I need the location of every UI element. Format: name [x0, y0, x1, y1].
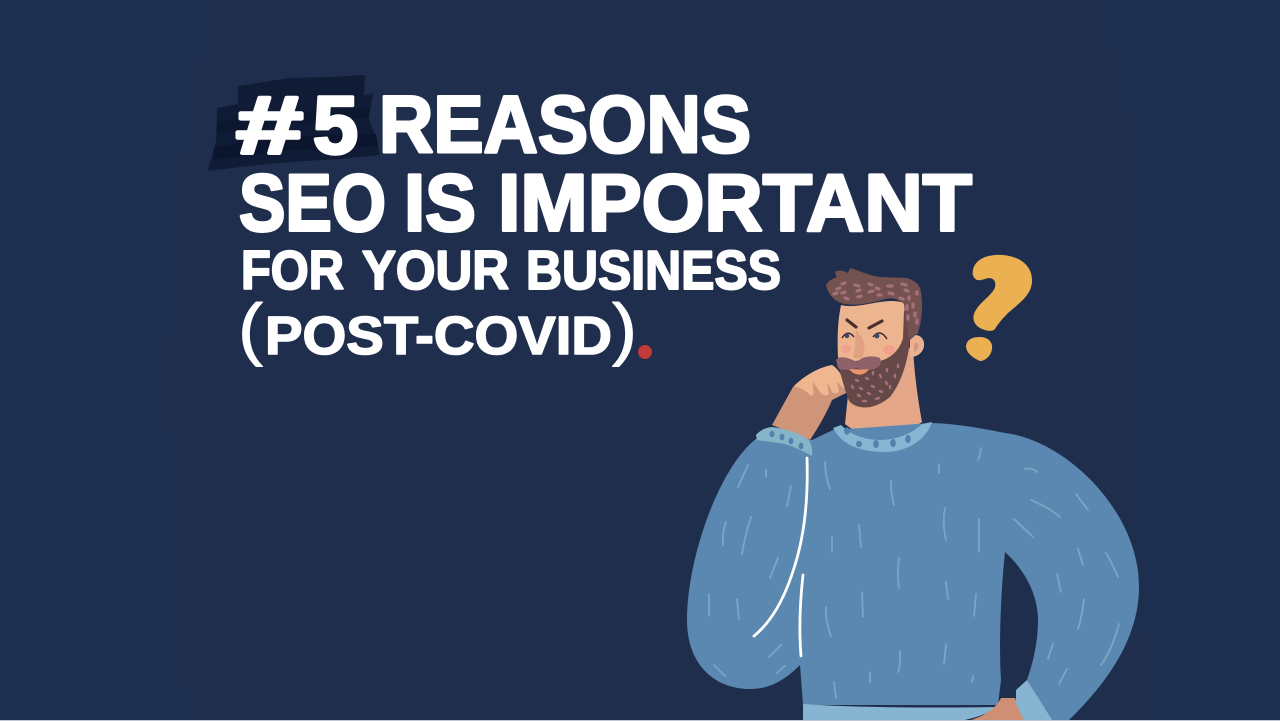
number five: 5 — [313, 80, 358, 171]
sweater hem — [803, 704, 997, 721]
eyes — [842, 333, 887, 339]
bottom edge line — [0, 720, 1280, 721]
beard — [838, 310, 918, 408]
background centre panel — [165, 0, 1145, 721]
word: post-covid: POST-COVID — [265, 306, 612, 366]
word: for: FOR — [241, 239, 344, 301]
mustache — [836, 356, 881, 370]
sweater collar — [833, 422, 932, 452]
nose shading — [853, 330, 864, 358]
cuff stitches — [770, 431, 803, 449]
mouth — [849, 369, 869, 375]
hair — [826, 268, 922, 339]
left parenthesis: ( — [238, 290, 263, 367]
face — [838, 301, 908, 392]
character: thinking man — [687, 268, 1139, 721]
beard stipple — [852, 365, 898, 401]
title — [236, 80, 972, 367]
right parenthesis: ) — [612, 290, 637, 367]
hash sign: # — [236, 80, 303, 171]
icon: question mark — [966, 255, 1032, 361]
word: business: BUSINESS — [526, 239, 781, 301]
word: your: YOUR — [362, 239, 509, 301]
neck — [845, 345, 922, 438]
word: SEO: SEO — [239, 158, 386, 248]
red full stop — [638, 345, 652, 359]
brush highlight behind number — [207, 75, 380, 171]
ear — [910, 335, 924, 357]
collar stitches — [844, 427, 911, 448]
word: important: IMPORTANT — [498, 158, 972, 248]
sweater knit marks — [709, 448, 1119, 698]
raised cuff — [756, 427, 812, 456]
sweater body — [687, 423, 1139, 721]
word: reasons: REASONS — [379, 80, 751, 170]
hand fingers — [794, 365, 848, 396]
right cuff — [1016, 680, 1053, 721]
cheeks — [841, 345, 851, 353]
raised forearm — [772, 365, 848, 440]
word: is: IS — [404, 158, 476, 248]
hair highlights — [834, 283, 917, 323]
eyebrows — [847, 320, 882, 328]
hand on hip — [968, 698, 1024, 721]
white sleeve seams — [754, 458, 807, 656]
